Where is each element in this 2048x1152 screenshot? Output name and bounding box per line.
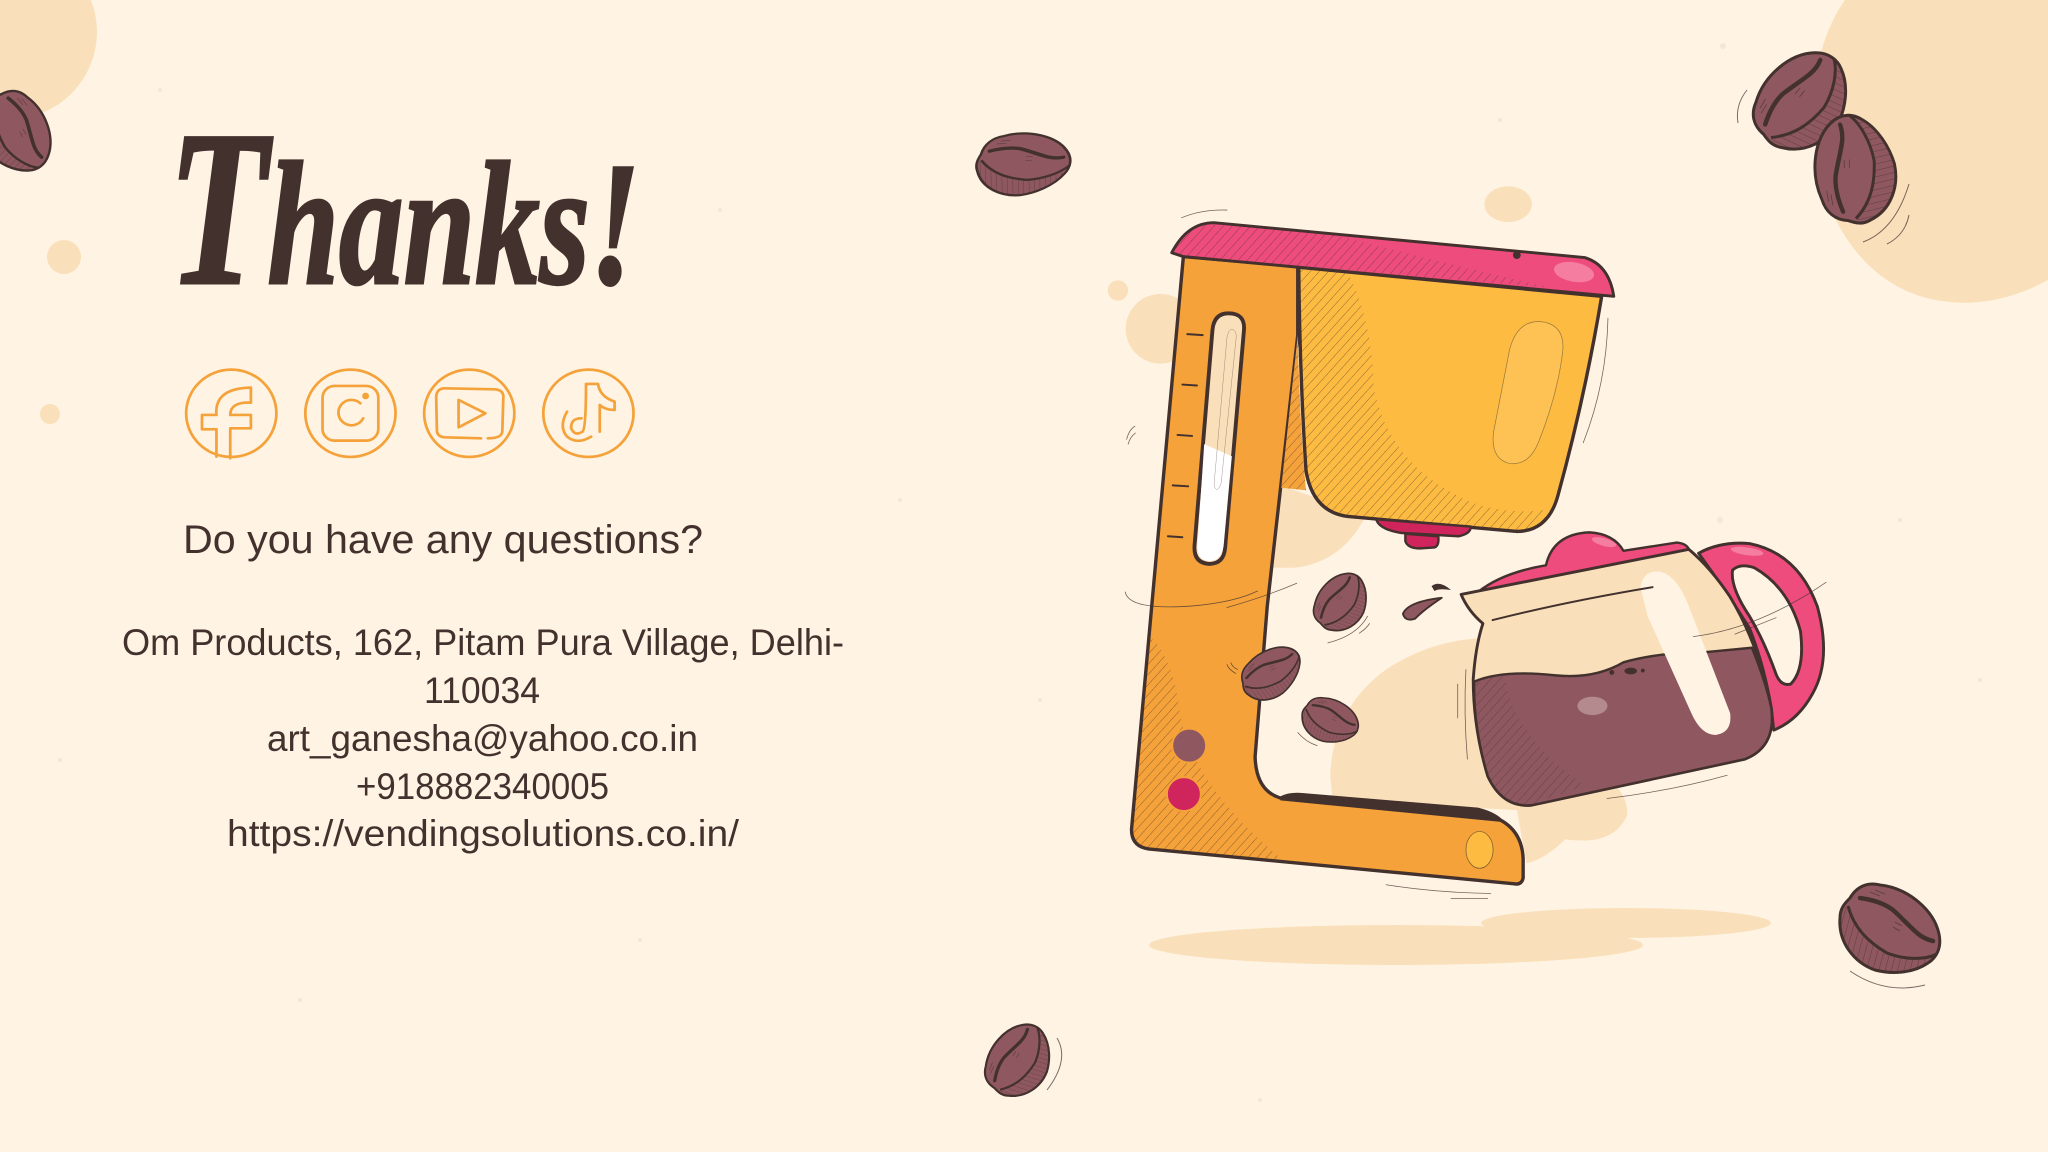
lid (1172, 223, 1614, 296)
blob: small left upper (47, 240, 81, 274)
bean: top right lower (1790, 104, 1915, 236)
gauge ticks (1168, 334, 1203, 537)
blob: small left lower (40, 404, 60, 424)
carafe glass (1461, 549, 1772, 805)
icon: youtube (424, 370, 514, 457)
blob: top right (1813, 0, 2048, 303)
tank spout (1376, 519, 1471, 536)
lid highlight (1552, 259, 1596, 285)
bean: top centre (969, 117, 1077, 208)
back support hatch (1281, 335, 1306, 490)
back support (1281, 335, 1306, 490)
bean: top left (0, 80, 69, 182)
base slot (1280, 793, 1505, 822)
body hatch (1133, 636, 1284, 861)
machine body (1132, 257, 1523, 884)
coffee machine illustration (1108, 186, 1826, 898)
coffee hatch (1476, 674, 1585, 804)
carafe rim line (1493, 587, 1653, 620)
floor shadows (1149, 908, 1771, 965)
social icons (186, 370, 634, 458)
carafe highlight (1640, 572, 1730, 735)
bean: bottom centre (984, 1023, 1050, 1097)
website: https://vendingsolutions.co.in/ (227, 813, 740, 854)
coffee bubbles (1609, 668, 1645, 675)
falling beans (1233, 571, 1368, 744)
lid hatch (1174, 225, 1551, 288)
address line 1: Om Products, 162, Pitam Pura Village, Delhi- (122, 622, 844, 663)
icon: instagram (305, 370, 396, 457)
tank hatch (1300, 268, 1548, 530)
email: art_ganesha@yahoo.co.in (267, 718, 698, 759)
lid dot (1513, 251, 1521, 259)
bean motion lines (1047, 90, 1925, 1090)
water gauge (1194, 313, 1244, 564)
phone: +918882340005 (356, 766, 609, 807)
icon: facebook (186, 370, 276, 458)
bean: top right upper (1748, 43, 1852, 157)
address line 2: 110034 (424, 670, 540, 711)
carafe lid highlight (1591, 535, 1617, 549)
tank window (1493, 322, 1563, 464)
question text: Do you have any questions? (183, 518, 703, 562)
spout tip (1405, 534, 1438, 548)
blobs behind machine (1108, 186, 1627, 863)
machine buttons (1167, 729, 1206, 811)
bean: bottom right (1840, 884, 1940, 972)
icon: tiktok (543, 370, 634, 457)
coffee drops (1403, 584, 1451, 620)
carafe lid (1478, 532, 1689, 592)
carafe coffee (1474, 648, 1772, 805)
carafe handle (1699, 543, 1824, 730)
coffee shine (1577, 697, 1607, 715)
title: Thanks! (168, 86, 640, 332)
motion lines (1125, 210, 1826, 898)
filter tank (1299, 267, 1602, 531)
contact details (122, 622, 844, 854)
base indicator (1466, 831, 1493, 868)
handle highlight (1730, 545, 1764, 557)
blob: top left (0, 0, 97, 119)
